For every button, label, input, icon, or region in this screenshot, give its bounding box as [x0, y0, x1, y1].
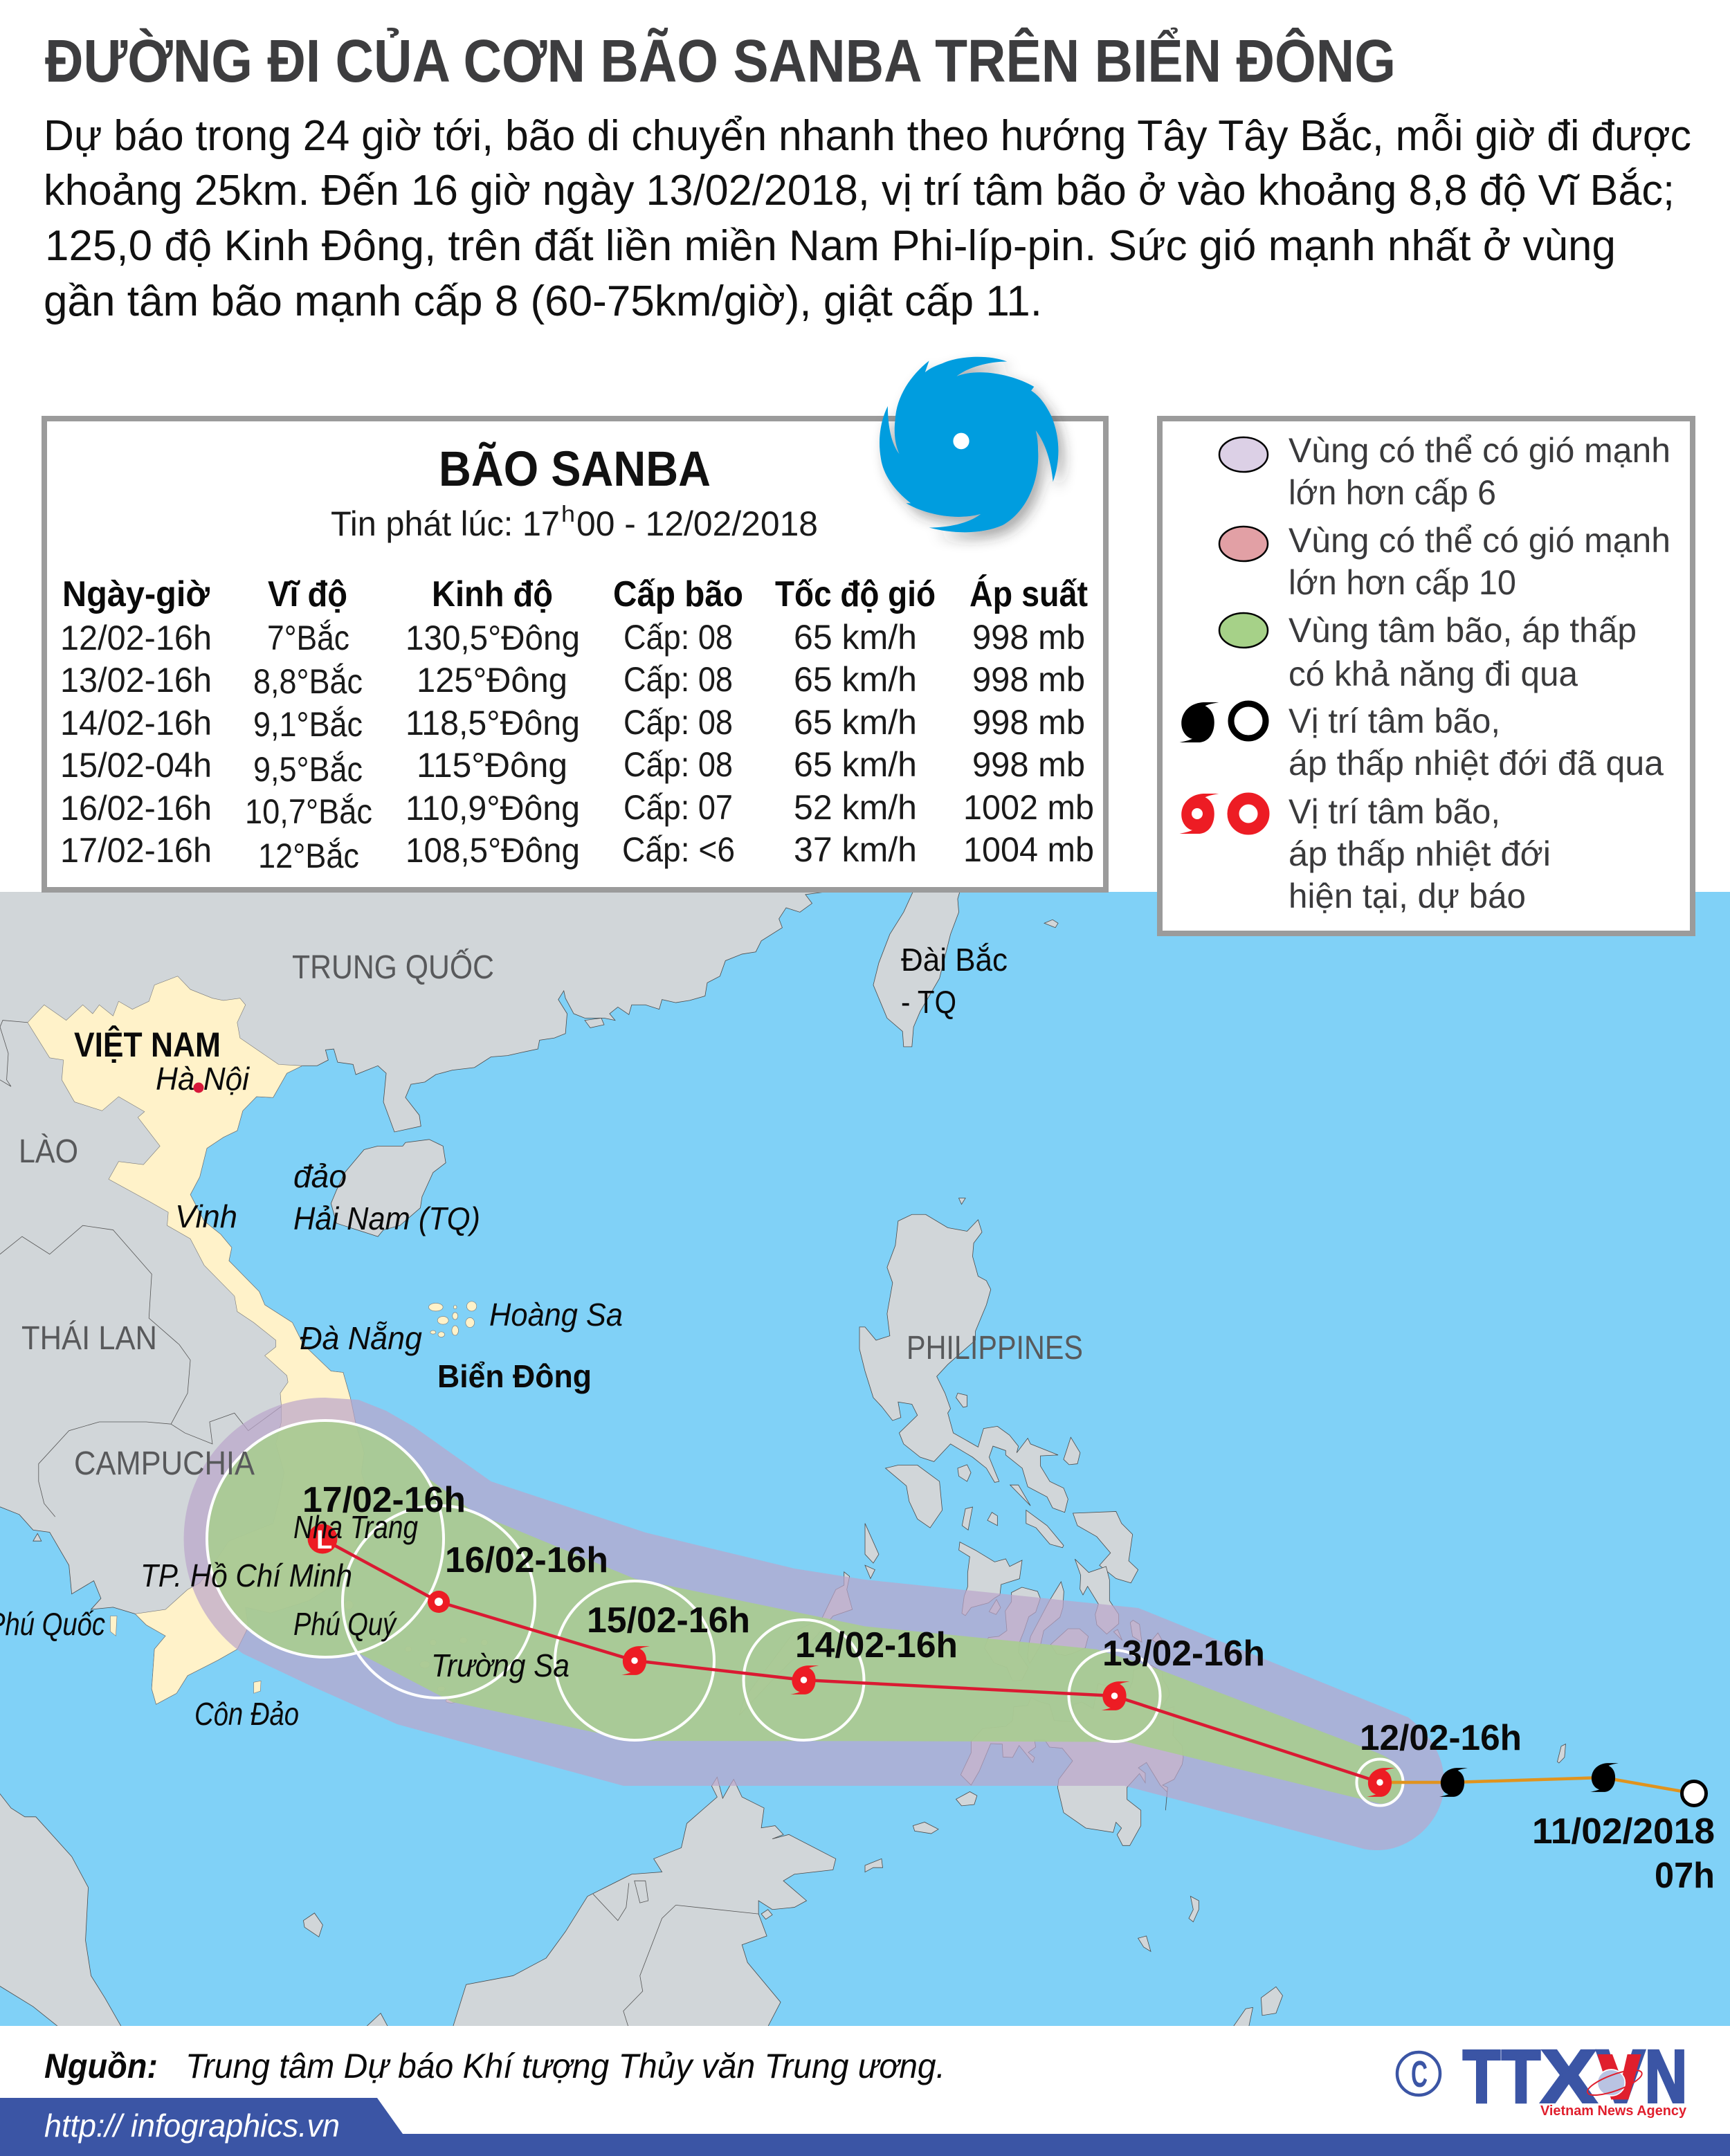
- icon: blue typhoon: [880, 357, 1058, 532]
- table row 16/02: 1002 mb: [963, 788, 1094, 827]
- bulletin time: h: [561, 501, 575, 527]
- table row 14/02: 9,1°Bắc: [253, 705, 363, 744]
- legend item: level 10 wind zone: [1219, 521, 1670, 602]
- land: Gulf of Thailand islet: [33, 1533, 42, 1541]
- forecast zone: winds over level 6: [184, 1398, 1444, 1850]
- legend item: storm centre zone: có khả năng đi qua: [1289, 655, 1578, 693]
- logo tagline: Vietnam News Agency: [1540, 2103, 1687, 2119]
- intro paragraph: gần tâm bão mạnh cấp 8 (60-75km/giờ), giật cấp 11.: [44, 277, 1042, 325]
- land: Paracel islands: [428, 1301, 477, 1337]
- legend item: past position: [1180, 702, 1664, 783]
- title: ĐƯỜNG ĐI CỦA CƠN BÃO SANBA TRÊN BIỂN ĐÔNG: [45, 27, 1396, 95]
- country labels: PHILIPPINES: [907, 1330, 1083, 1367]
- land masses: [0, 886, 1565, 2029]
- table row 16/02: Cấp: 07: [623, 788, 733, 827]
- map: [0, 886, 1730, 2029]
- icon: storm position 13/02: [1102, 1681, 1129, 1710]
- table row 16/02: [60, 788, 1094, 831]
- table row 13/02: 8,8°Bắc: [253, 662, 363, 701]
- place labels: Côn Đảo: [194, 1696, 299, 1732]
- intro paragraph: khoảng 25km. Đến 16 giờ ngày 13/02/2018, vị trí tâm bão ở vào khoảng 8,8 độ Vĩ Bắc;: [44, 167, 1675, 214]
- forecast track line: [322, 1539, 1380, 1782]
- land: Cebu: [1029, 1581, 1064, 1644]
- bulletin time: 00 - 12/02/2018: [576, 504, 818, 543]
- place labels: Vinh: [175, 1198, 237, 1234]
- table header row: Kinh độ: [432, 574, 553, 614]
- logo wordmark: T: [1502, 2034, 1540, 2118]
- place labels: [0, 942, 1008, 1732]
- panel: legend: [1160, 419, 1693, 933]
- table header row: Vĩ độ: [268, 574, 347, 614]
- forecast circles: [207, 1420, 1403, 1806]
- place labels: Hà Nội: [156, 1061, 251, 1097]
- panel frame: [44, 419, 1106, 890]
- past track line: [1380, 1778, 1694, 1793]
- table row 13/02: [60, 660, 1085, 701]
- copyright mark: C: [1411, 2054, 1428, 2095]
- table row 12/02: 65 km/h: [794, 618, 917, 657]
- table row 16/02: 10,7°Bắc: [245, 792, 372, 831]
- legend item: current and forecast position: áp thấp nhiệt đới: [1289, 834, 1551, 873]
- table row 14/02: 998 mb: [972, 703, 1085, 742]
- legend item: level 10 wind zone: Vùng có thể có gió mạnh: [1289, 521, 1670, 560]
- table row 14/02: Cấp: 08: [623, 703, 733, 742]
- place labels: Phú Quý: [293, 1606, 397, 1642]
- country labels: [19, 948, 1083, 1482]
- table row 12/02: [60, 618, 1085, 657]
- table title: BÃO SANBA: [439, 442, 711, 497]
- legend item: current and forecast position: hiện tại, dự báo: [1289, 877, 1526, 915]
- table header row: [62, 574, 1088, 614]
- logo red V and globe: [1585, 2054, 1644, 2100]
- table row 14/02: 65 km/h: [794, 703, 917, 742]
- land: Samar and outlying islands: [865, 1507, 1565, 2029]
- table row 13/02: 13/02-16h: [60, 661, 212, 700]
- logo wordmark: T: [1463, 2034, 1500, 2118]
- place labels: Nha Trang: [293, 1509, 418, 1545]
- border lines: [0, 1021, 282, 1517]
- table row 15/02: Cấp: 08: [623, 745, 733, 784]
- table row 15/02: [60, 745, 1085, 789]
- table row 13/02: Cấp: 08: [623, 660, 733, 699]
- land: Guimaras: [989, 1600, 1001, 1614]
- land: Bohol: [1050, 1629, 1089, 1648]
- land: small Gulf of Tonkin island: [585, 1018, 604, 1027]
- icon: storm position 15/02: [621, 1646, 650, 1675]
- date labels on track: 12/02-16h: [1360, 1718, 1522, 1758]
- date labels on track: 11/02/2018: [1532, 1811, 1715, 1852]
- source line: Nguồn:: [44, 2047, 158, 2085]
- land: Malay peninsula, Borneo, Palawan and Spratly: [0, 1572, 853, 2029]
- icon: past storm position: [1439, 1768, 1468, 1797]
- land: Vietnam: [28, 976, 370, 1704]
- table row 16/02: 52 km/h: [794, 788, 917, 827]
- country labels: THÁI LAN: [21, 1320, 157, 1357]
- table row 15/02: 115°Đông: [417, 746, 567, 785]
- country labels: CAMPUCHIA: [74, 1445, 255, 1482]
- place labels: Trường Sa: [431, 1647, 570, 1683]
- bulletin time: Tin phát lúc: 17: [331, 504, 560, 543]
- land: Mindanao: [960, 1665, 1183, 1845]
- bulletin time: [331, 501, 818, 543]
- table row 12/02: Cấp: 08: [623, 618, 733, 657]
- place labels: Hải Nam (TQ): [293, 1200, 480, 1236]
- intro paragraph: Dự báo trong 24 giờ tới, bão di chuyển nhanh theo hướng Tây Tây Bắc, mỗi giờ đi được: [44, 112, 1691, 160]
- legend item: current and forecast position: Vị trí tâm bão,: [1289, 792, 1500, 831]
- table row 15/02: 998 mb: [972, 745, 1085, 784]
- place labels: đảo: [293, 1158, 347, 1194]
- legend item: storm centre zone: Vùng tâm bão, áp thấp: [1289, 611, 1637, 650]
- date labels on track: 14/02-16h: [795, 1625, 958, 1665]
- table row 14/02: [60, 703, 1085, 744]
- icon: storm position 12/02: [1367, 1768, 1395, 1797]
- logo wordmark: [1463, 2034, 1687, 2118]
- table header row: Tốc độ gió: [775, 574, 936, 614]
- land: Negros: [988, 1587, 1041, 1642]
- icon: storm position 14/02: [790, 1665, 819, 1694]
- table header row: Ngày-giờ: [62, 574, 210, 614]
- icon: storm position 17/02: L: [316, 1526, 332, 1555]
- table row 17/02: 1004 mb: [963, 830, 1094, 869]
- legend item: level 6 wind zone: [1219, 431, 1670, 512]
- land: Hainan island: [331, 1140, 446, 1236]
- table row 17/02: 12°Bắc: [258, 837, 359, 875]
- table row 15/02: 15/02-04h: [60, 746, 212, 785]
- table row 16/02: 110,9°Đông: [406, 789, 580, 828]
- table row 15/02: 65 km/h: [794, 745, 917, 784]
- table header row: Cấp bão: [613, 574, 743, 614]
- place labels: VIỆT NAM: [74, 1025, 221, 1064]
- table row 17/02: Cấp: <6: [622, 830, 735, 869]
- legend item: level 6 wind zone: lớn hơn cấp 6: [1289, 473, 1496, 512]
- legend item: current and forecast position: [1180, 792, 1551, 915]
- place labels: - TQ: [901, 984, 956, 1020]
- legend item: storm centre zone: [1219, 611, 1637, 693]
- table row 12/02: 7°Bắc: [267, 619, 349, 657]
- sea background: [0, 892, 1730, 2026]
- place labels: TP. Hồ Chí Minh: [140, 1557, 352, 1593]
- table row 16/02: 16/02-16h: [60, 789, 212, 828]
- logo wordmark: N: [1645, 2034, 1687, 2118]
- intro paragraph: [44, 112, 1691, 325]
- date labels on track: [302, 1480, 1715, 1896]
- icon: past storm position earlier: [1590, 1763, 1619, 1792]
- table row 17/02: 108,5°Đông: [406, 831, 580, 870]
- icon: Hanoi dot: [194, 1082, 203, 1093]
- place labels: Biển Đông: [437, 1358, 592, 1394]
- logo: TTXVN: [1397, 2034, 1687, 2119]
- forecast zone: storm centre corridor: [207, 1421, 1403, 1804]
- table row 15/02: 9,5°Bắc: [253, 750, 363, 789]
- legend item: past position: áp thấp nhiệt đới đã qua: [1289, 744, 1664, 783]
- logo wordmark: X: [1541, 2034, 1596, 2118]
- copyright mark: [1397, 2052, 1440, 2095]
- date labels on track: 13/02-16h: [1102, 1634, 1265, 1674]
- legend item: level 10 wind zone: lớn hơn cấp 10: [1289, 563, 1516, 602]
- land: Taiwan and Luzon group: [859, 886, 1080, 1528]
- table row 13/02: 998 mb: [972, 660, 1085, 699]
- land: Panay: [959, 1542, 1022, 1616]
- logo wordmark: V: [1596, 2034, 1645, 2118]
- table row 17/02: 37 km/h: [794, 830, 917, 869]
- country labels: LÀO: [19, 1133, 78, 1170]
- date labels on track: 17/02-16h: [302, 1480, 466, 1520]
- table row 12/02: 12/02-16h: [60, 619, 212, 657]
- icon: past low pressure start: [1682, 1781, 1706, 1806]
- legend frame: [1160, 419, 1693, 933]
- place labels: Hoàng Sa: [489, 1297, 623, 1333]
- place labels: Đà Nẵng: [300, 1320, 422, 1356]
- place labels: Đài Bắc: [901, 942, 1008, 978]
- intro paragraph: 125,0 độ Kinh Đông, trên đất liền miền Nam Phi-líp-pin. Sức gió mạnh nhất ở vùng: [45, 222, 1616, 270]
- table row 14/02: 14/02-16h: [60, 704, 212, 742]
- website url: http:// infographics.vn: [44, 2108, 340, 2144]
- table row 12/02: 130,5°Đông: [406, 619, 580, 657]
- panel: storm data table: [44, 419, 1106, 890]
- land: small Visayan islets: [1113, 1620, 1163, 1645]
- date labels on track: 15/02-16h: [587, 1600, 750, 1641]
- table row 12/02: 998 mb: [972, 618, 1085, 657]
- date labels on track: 07h: [1655, 1856, 1715, 1896]
- table row 14/02: 118,5°Đông: [406, 704, 580, 742]
- country labels: TRUNG QUỐC: [292, 948, 494, 986]
- table row 13/02: 65 km/h: [794, 660, 917, 699]
- legend item: level 6 wind zone: Vùng có thể có gió mạnh: [1289, 431, 1670, 470]
- legend item: past position: Vị trí tâm bão,: [1289, 702, 1500, 740]
- source line: Trung tâm Dự báo Khí tượng Thủy văn Trung ương.: [185, 2047, 945, 2085]
- table row 13/02: 125°Đông: [417, 661, 567, 700]
- icon: storm position 16/02: [428, 1591, 450, 1613]
- table header row: Áp suất: [969, 574, 1088, 614]
- land: Leyte: [1075, 1559, 1119, 1634]
- footer band: [0, 2098, 1730, 2156]
- date labels on track: 16/02-16h: [445, 1540, 608, 1580]
- icon: storm position 17/02: [307, 1524, 338, 1555]
- table row 17/02: 17/02-16h: [60, 831, 212, 870]
- table row 17/02: [60, 830, 1094, 875]
- land: mainland Asia: [0, 886, 822, 1704]
- land: Visayas and Mindanao: [959, 1542, 1183, 1845]
